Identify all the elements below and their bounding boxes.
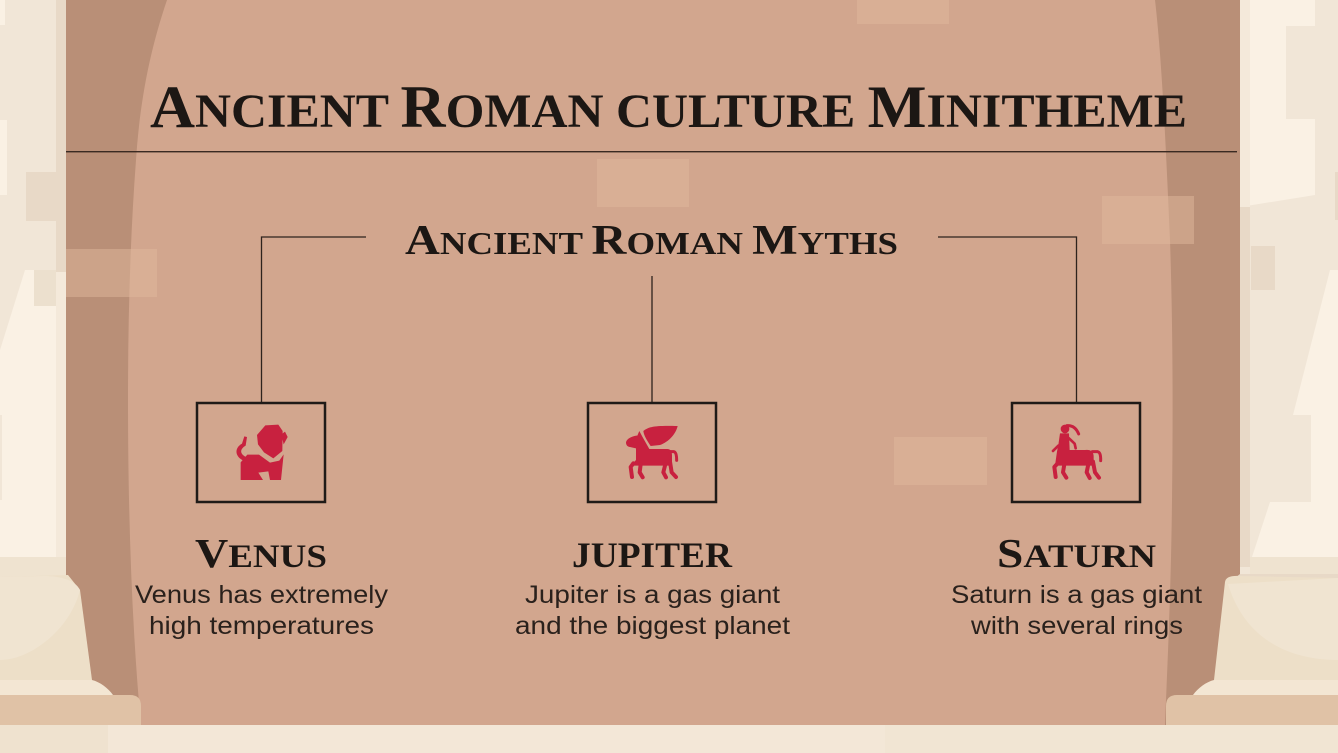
- connector: venus: [262, 237, 366, 402]
- decorative wall bricks: [66, 0, 1194, 485]
- description: venus: high temperatures: [149, 612, 374, 640]
- panel: saturn: [951, 403, 1202, 640]
- description: jupiter: and the biggest planet: [515, 612, 790, 640]
- left column: [0, 0, 141, 725]
- icon frame: venus: [197, 403, 325, 502]
- name: saturn: SATURN: [997, 530, 1156, 576]
- right column: [1166, 0, 1338, 725]
- title rule: [66, 151, 1237, 152]
- description: venus: [135, 581, 389, 640]
- description: saturn: with several rings: [970, 612, 1183, 640]
- description: jupiter: Jupiter is a gas giant: [525, 581, 780, 609]
- icon: pegasus: [626, 426, 678, 477]
- subtitle: ANCIENT ROMAN MYTHS: [405, 218, 898, 264]
- description: saturn: [951, 581, 1202, 640]
- panel: jupiter: [515, 403, 790, 640]
- name: jupiter: JUPITER: [572, 535, 733, 575]
- left curtain: [66, 0, 167, 725]
- panel: venus: [135, 403, 389, 640]
- icon: centaur: [1053, 425, 1101, 478]
- description: venus: Venus has extremely: [135, 581, 389, 609]
- icon frame: jupiter: [588, 403, 716, 502]
- description: saturn: Saturn is a gas giant: [951, 581, 1202, 609]
- description: jupiter: [515, 581, 790, 640]
- connector: saturn: [938, 237, 1076, 402]
- floor: [0, 725, 1338, 753]
- right curtain: [1155, 0, 1240, 725]
- icon: lion: [236, 425, 288, 480]
- title: ANCIENT ROMAN CULTURE MINITHEME: [150, 74, 1187, 140]
- connector: jupiter: [651, 276, 653, 402]
- name: venus: VENUS: [195, 530, 327, 576]
- icon frame: saturn: [1012, 403, 1140, 502]
